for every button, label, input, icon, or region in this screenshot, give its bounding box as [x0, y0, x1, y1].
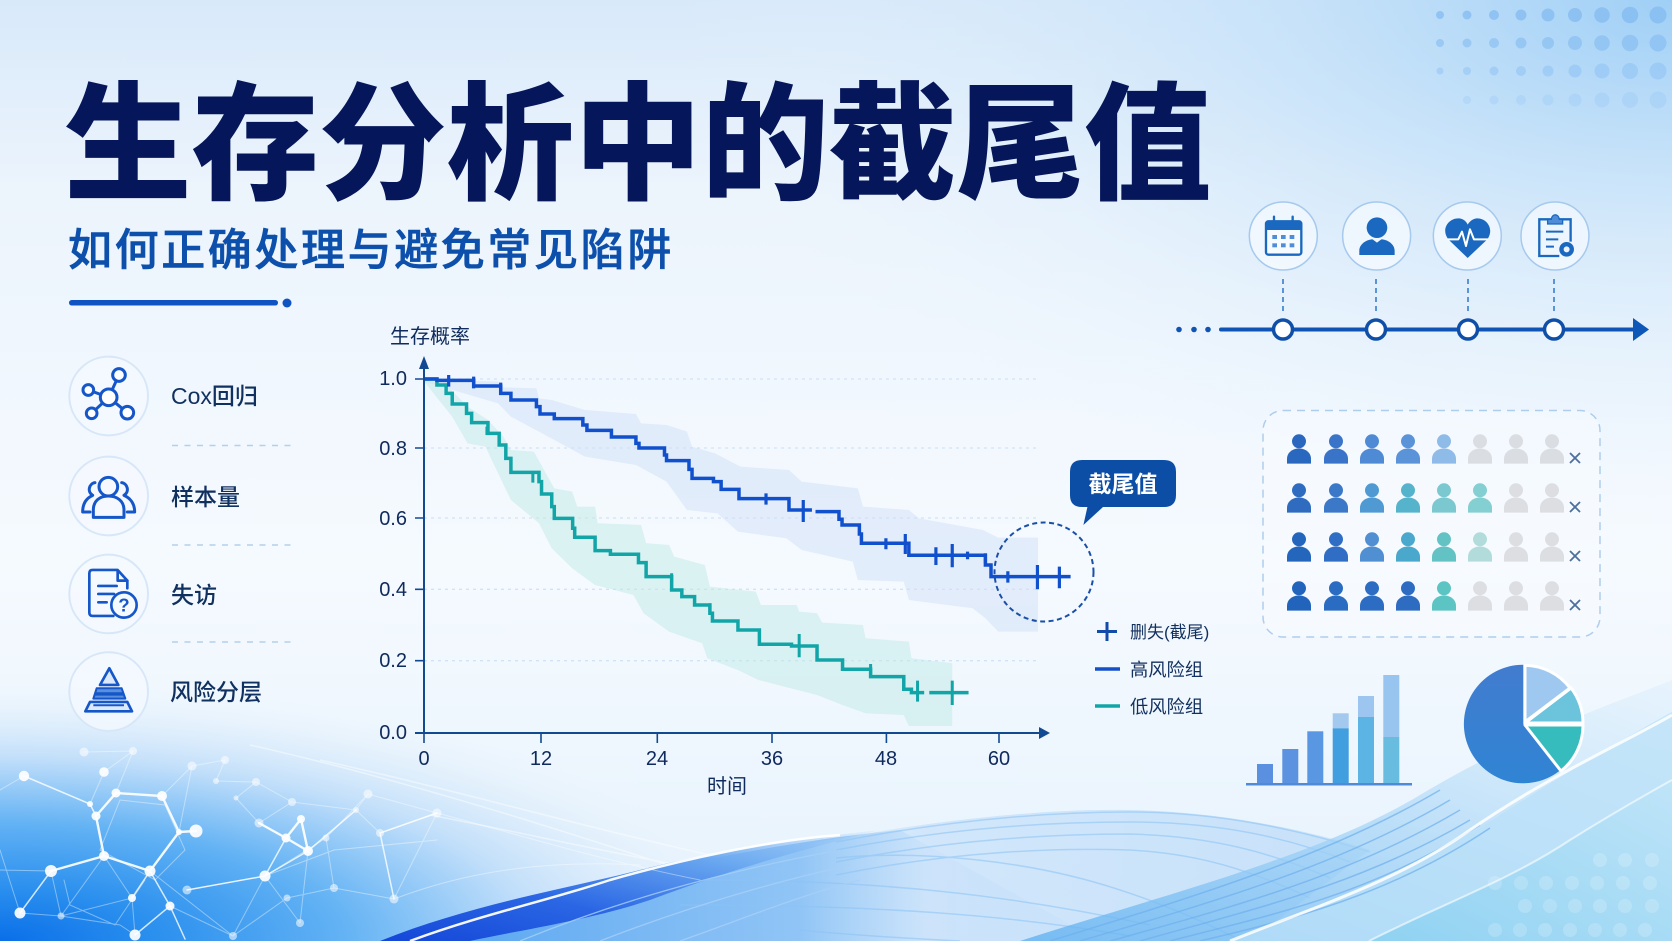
- list dividers: [172, 446, 297, 642]
- chart grid: [424, 379, 1038, 661]
- low-risk curve: [424, 379, 969, 705]
- panel: timeline with icons: [1176, 202, 1649, 341]
- bg hump wave: [800, 810, 1370, 941]
- y axis labels: 0.6: [379, 508, 407, 530]
- x axis labels: 48: [875, 748, 897, 770]
- bg molecular network: [0, 751, 700, 939]
- label: Cox回归: Cox回归: [171, 383, 258, 409]
- icon: risk stratification pyramid: [69, 652, 148, 731]
- icon: patient: [1343, 202, 1411, 270]
- y axis labels: 0.4: [379, 579, 407, 601]
- x axis labels: 0: [418, 748, 430, 770]
- icon: loss to follow-up document: [69, 555, 148, 633]
- chart: Kaplan-Meier survival curves: [379, 325, 1071, 798]
- x axis labels: 36: [761, 748, 783, 770]
- title: 生存分析中的截尾值: [64, 75, 1212, 217]
- bg blue streak: [380, 830, 880, 941]
- panel: patient grid: [1263, 410, 1600, 637]
- y axis labels: 1.0: [379, 368, 407, 390]
- subtitle: 如何正确处理与避免常见陷阱: [68, 226, 674, 275]
- bg sweeping lines: [250, 745, 836, 905]
- icon: Cox network: [69, 357, 148, 435]
- patient row 2: [1287, 483, 1580, 513]
- x axis title: 时间: [707, 775, 747, 798]
- legend: [1095, 622, 1209, 717]
- icon: sample size people: [69, 457, 148, 535]
- callout: censored value: [994, 460, 1176, 622]
- bar chart: [1246, 675, 1412, 786]
- bg right ribbon: [1020, 680, 1672, 941]
- y axis labels: [379, 368, 407, 744]
- y axis labels: 0.2: [379, 650, 407, 672]
- label: 样本量: 样本量: [171, 484, 240, 510]
- label: 失访: 失访: [171, 582, 217, 608]
- title underline: [69, 298, 292, 308]
- legend: 高风险组: [1130, 659, 1203, 680]
- patient row 4: [1287, 581, 1580, 611]
- x axis labels: 12: [530, 748, 552, 770]
- icon: loss to follow-up document: ?: [118, 595, 130, 616]
- patient row 1: [1287, 434, 1580, 464]
- y axis title: 生存概率: [390, 325, 470, 348]
- x axis labels: 24: [646, 748, 668, 770]
- high-risk curve: [424, 375, 1071, 589]
- y axis labels: 0.8: [379, 438, 407, 460]
- connectors: [1283, 279, 1554, 312]
- callout: censored value: 截尾值: [1088, 471, 1158, 497]
- icon: heart rate: [1433, 202, 1501, 270]
- y axis labels: 0.0: [379, 722, 407, 744]
- panel: method list: [69, 357, 297, 731]
- bg blue sheet below streak: [420, 830, 1100, 941]
- label: 风险分层: 风险分层: [170, 679, 262, 705]
- icon: calendar: [1249, 202, 1317, 270]
- timeline axis: [1176, 318, 1649, 341]
- x axis labels: [418, 748, 1010, 770]
- icon: clipboard: [1521, 202, 1589, 270]
- bg lower-right dots: [1488, 853, 1659, 937]
- confidence bands: [424, 379, 1038, 726]
- x axis labels: 60: [988, 748, 1010, 770]
- axes: [415, 356, 1050, 743]
- patient row 3: [1287, 532, 1580, 562]
- legend: 低风险组: [1130, 696, 1203, 717]
- bg dots: [1436, 6, 1666, 108]
- legend: 删失(截尾): [1130, 623, 1209, 642]
- pie chart: [1464, 665, 1583, 783]
